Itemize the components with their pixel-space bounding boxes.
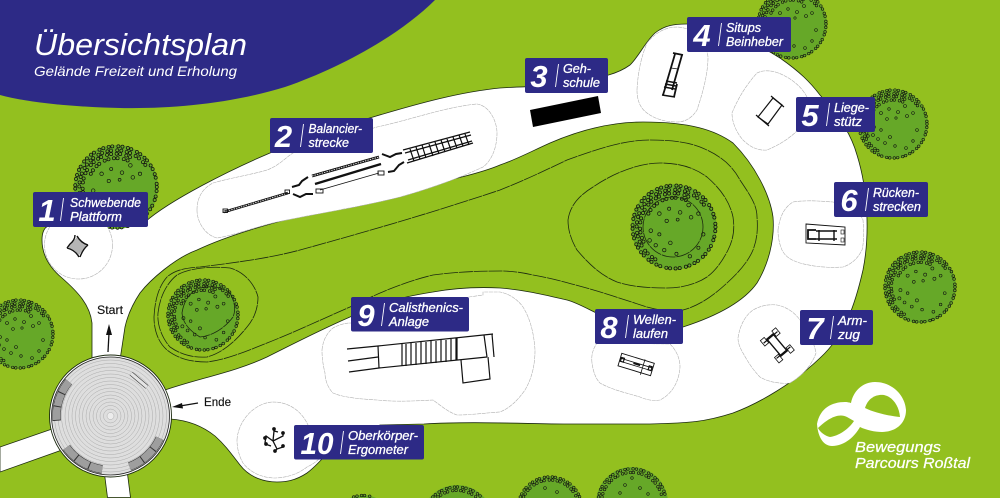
label 9: Anlage [388, 314, 429, 329]
side path south [104, 470, 130, 498]
label 4: 4 [692, 18, 711, 53]
equipment 1: floating platform [67, 235, 88, 257]
label 1 [33, 192, 148, 228]
subtitle: Gelände Freizeit und Erholung [34, 63, 237, 79]
label 5 [796, 97, 875, 133]
label 10: Ergometer [348, 442, 409, 457]
zone: station 5 [732, 71, 807, 150]
label 1: Schwebende [70, 195, 141, 210]
tree: right upper [858, 89, 928, 159]
zone: station 1 [44, 211, 112, 279]
label 7 [800, 310, 873, 346]
label 7: Arm- [837, 313, 868, 328]
label 2 [270, 118, 373, 154]
end label: Ende [204, 395, 231, 409]
tree: top left [74, 145, 158, 229]
label 3 [525, 58, 608, 94]
logo text [855, 439, 971, 472]
label 6: 6 [840, 183, 858, 218]
label 8: 8 [600, 310, 618, 345]
label 4: Situps [726, 20, 761, 35]
tree: left edge [0, 299, 54, 369]
tree: top right [757, 0, 827, 59]
zone: station 8 [592, 343, 680, 400]
label 4 [687, 17, 791, 53]
label 9: Calisthenics- [389, 300, 464, 315]
bench: bottom right [130, 438, 160, 466]
equipment 2: balancing course [223, 132, 473, 212]
label 3: Geh- [563, 61, 592, 76]
label 8 [595, 309, 683, 345]
label 6 [834, 182, 928, 218]
label 3: 3 [530, 59, 548, 94]
label 6: Rücken- [873, 185, 920, 200]
logo mark [817, 382, 906, 446]
header banner [0, 0, 435, 108]
label 10: Oberkörper- [348, 428, 419, 443]
zone: station 4 [637, 27, 708, 122]
zone: station 9 [322, 292, 535, 415]
tree: central island [631, 184, 717, 270]
equipment 7: arm pull [760, 328, 794, 363]
label 1: 1 [38, 193, 56, 228]
equipment 8: wave walk [617, 352, 655, 378]
end arrow [172, 403, 198, 408]
start arrow [106, 324, 112, 352]
equipment 10: upper body ergometer [264, 428, 284, 452]
label 6: strecken [873, 199, 921, 214]
label 7: zug [837, 327, 861, 342]
label 9: 9 [357, 298, 375, 333]
logo text: Bewegungs [855, 439, 942, 456]
side path west [0, 428, 62, 472]
main white path [42, 24, 867, 482]
terrain contour lines [154, 140, 757, 362]
label 5: 5 [801, 98, 819, 133]
bench: bottom left [66, 447, 102, 469]
label 1: Plattform [70, 209, 122, 224]
label 10: 10 [300, 426, 334, 461]
equipment 5: push-up bar [756, 96, 784, 126]
equipment 9: calisthenics rig [347, 334, 494, 383]
central plaza [50, 355, 172, 477]
label 8: laufen [633, 326, 668, 341]
zone: station 7 [738, 305, 816, 383]
equipment 6: back stretcher [806, 224, 845, 245]
zone: station 6 [778, 201, 864, 267]
label 9 [351, 297, 469, 333]
label 5: stütz [834, 114, 862, 129]
trees: bottom row [350, 467, 668, 498]
label 7: 7 [806, 311, 825, 346]
start label: Start [97, 303, 124, 317]
label 2: 2 [274, 119, 292, 154]
equipment 4: situps bench [662, 53, 683, 97]
tree: small island [167, 279, 239, 351]
title: Übersichtsplan [34, 27, 247, 62]
zone: station 10 [237, 402, 340, 478]
label 10 [294, 425, 424, 461]
logo text: Parcours Roßtal [855, 455, 971, 472]
label 4: Beinheber [726, 34, 784, 49]
bench: left [56, 382, 69, 421]
label 2: Balancier- [308, 121, 363, 136]
tree: right lower [884, 251, 956, 323]
equipment 3: walking school [530, 96, 601, 127]
label 2: strecke [308, 135, 349, 150]
label 8: Wellen- [633, 312, 677, 327]
label 3: schule [563, 75, 600, 90]
label 5: Liege- [834, 100, 870, 115]
zone: station 2 [197, 104, 497, 238]
bench: slim top right [131, 374, 147, 387]
